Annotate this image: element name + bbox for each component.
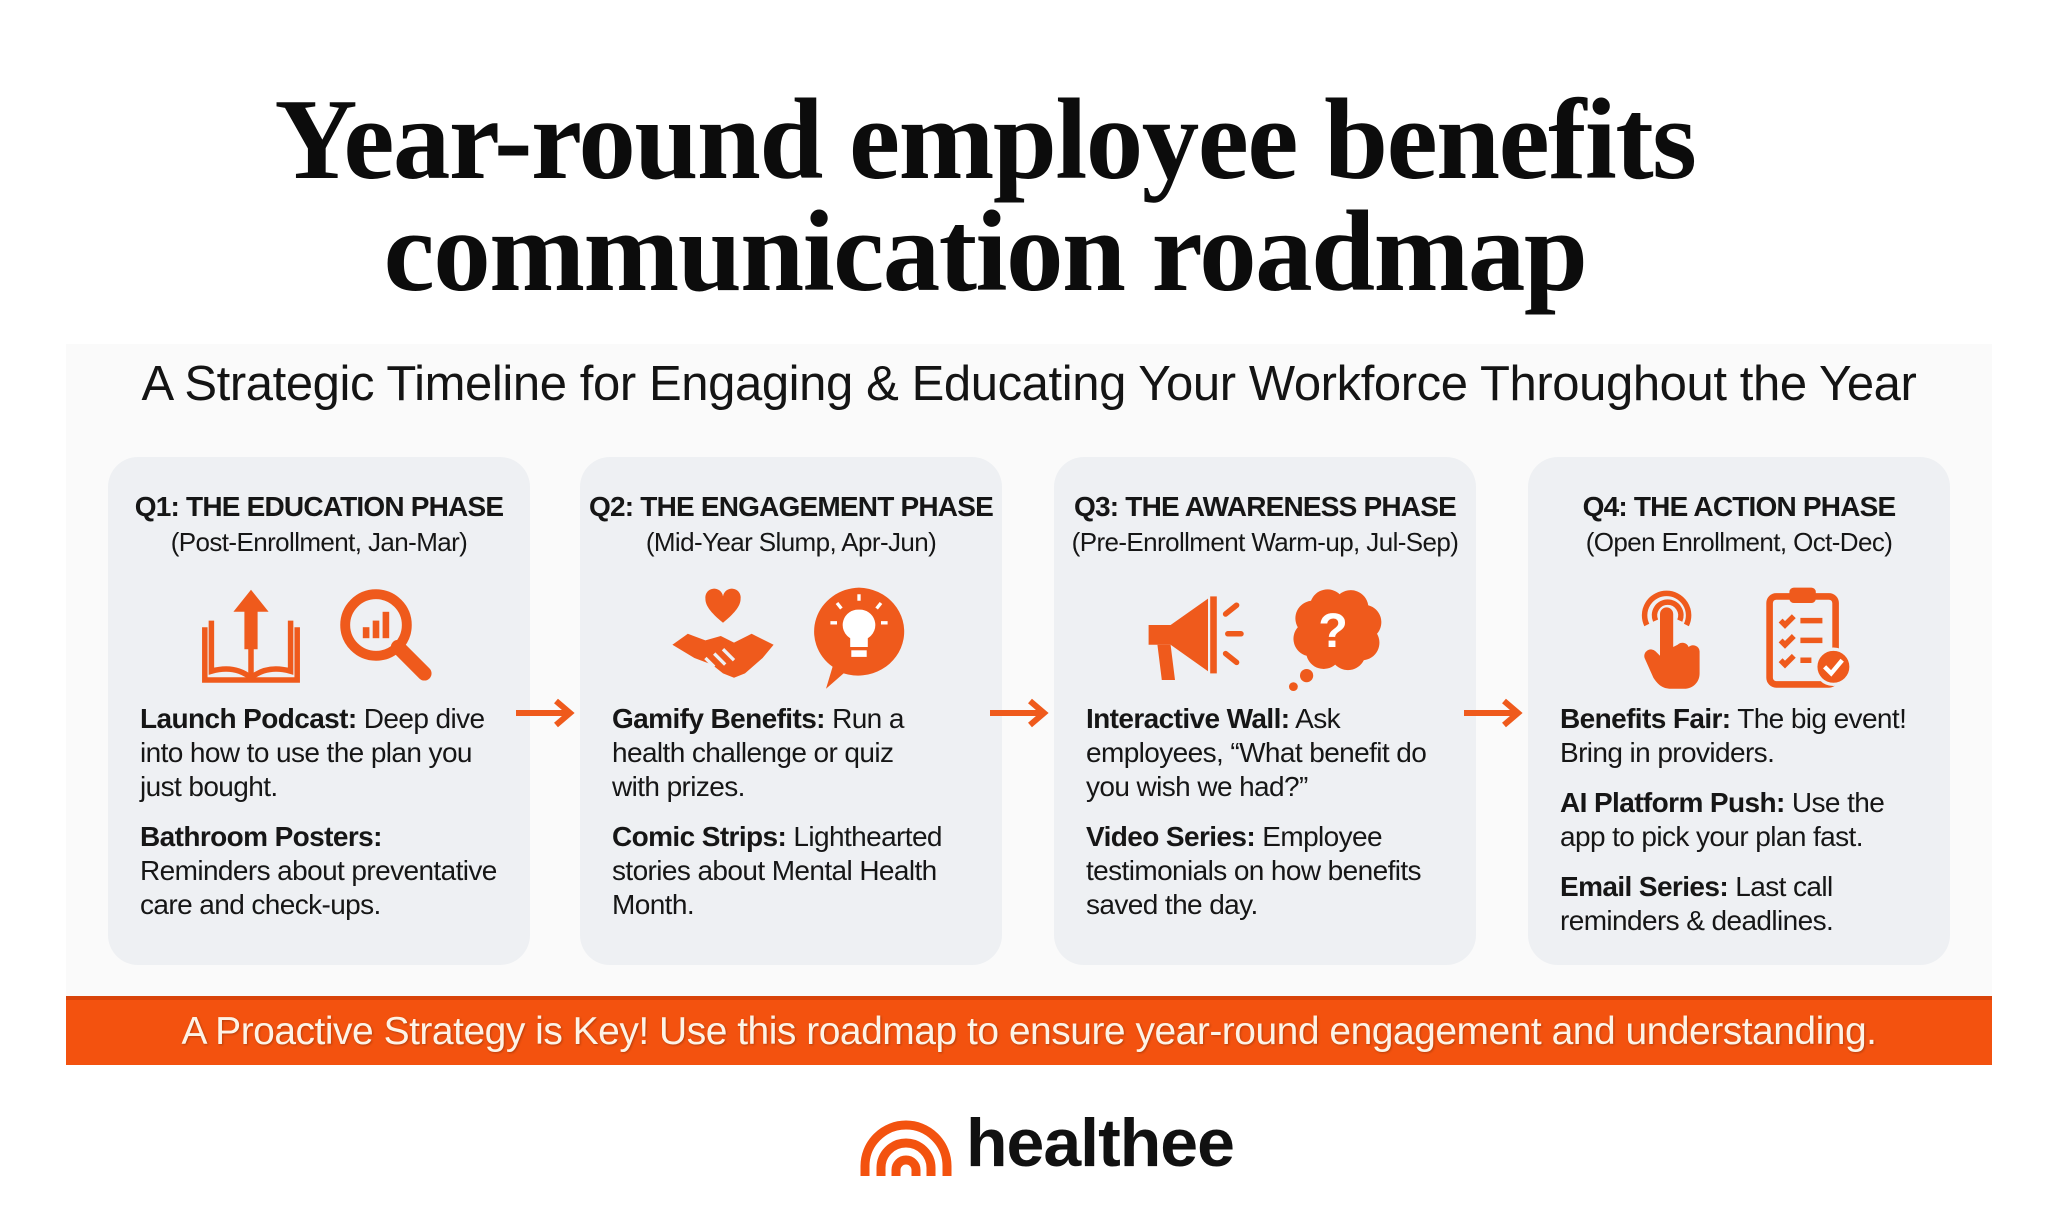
text: Q2 items: health challenge or quiz <box>612 737 893 768</box>
text: Q1 items: care and check-ups. <box>140 889 381 920</box>
background panel <box>66 344 1992 1000</box>
text: Q3 items: saved the day. <box>1086 889 1258 920</box>
heading: Q2: Q2: THE ENGAGEMENT PHASE <box>589 491 993 522</box>
text: Q1 items: Launch Podcast: Deep dive <box>140 703 484 734</box>
title: Year-round employee benefits <box>275 76 1695 203</box>
text: Q1 items: into how to use the plan you <box>140 737 472 768</box>
subheading: Q2: (Mid-Year Slump, Apr-Jun) <box>646 527 936 557</box>
text: Q3 items: testimonials on how benefits <box>1086 855 1421 886</box>
logo: healthee: healthee <box>966 1105 1234 1181</box>
text: Q3 items: employees, “What benefit do <box>1086 737 1426 768</box>
text: Q4 items: Benefits Fair: The big event! <box>1560 703 1906 734</box>
text: Q4 items: Bring in providers. <box>1560 737 1774 768</box>
text: Q3 items <box>1086 703 1426 920</box>
text: Q2 items: Gamify Benefits: Run a <box>612 703 904 734</box>
text: Q4 items: app to pick your plan fast. <box>1560 821 1863 852</box>
text: Q3 items: Video Series: Employee <box>1086 821 1382 852</box>
text: Q3 items: Interactive Wall: Ask <box>1086 703 1340 734</box>
text: Q4 items: reminders & deadlines. <box>1560 905 1833 936</box>
icons: handshake and idea bubble <box>672 588 904 689</box>
heading: Q1: Q1: THE EDUCATION PHASE <box>135 491 503 522</box>
banner: A Proactive Strategy is Key! Use this roadmap to ensure year-round engagement and understanding. <box>181 1010 1877 1053</box>
arrow 3 <box>1464 698 1522 728</box>
text: Q4 items: AI Platform Push: Use the <box>1560 787 1884 818</box>
panel: Q2 <box>580 457 1002 965</box>
subheading: Q1: (Post-Enrollment, Jan-Mar) <box>171 527 467 557</box>
icons: megaphone and question cloud: ? <box>1318 604 1348 658</box>
text: Q1 items <box>139 703 497 920</box>
subtitle: A Strategic Timeline for Engaging & Educating Your Workforce Throughout the Year <box>142 357 1916 411</box>
text: Q2 items: Month. <box>612 889 694 920</box>
icons: tap and checklist <box>1642 588 1850 689</box>
arrow 2 <box>990 698 1048 728</box>
title <box>275 76 1695 315</box>
panel: Q4 <box>1528 457 1950 965</box>
text: Q1 items: Bathroom Posters: <box>140 821 382 852</box>
heading: Q4: Q4: THE ACTION PHASE <box>1583 491 1895 522</box>
panel: Q3 <box>1054 457 1476 965</box>
panel: Q1 <box>108 457 530 965</box>
text: Q1 items: just bought. <box>140 771 278 802</box>
icons: megaphone and question cloud <box>1148 589 1382 691</box>
heading: Q3: Q3: THE AWARENESS PHASE <box>1074 491 1456 522</box>
text: Q2 items: Comic Strips: Lighthearted <box>612 821 942 852</box>
arrow 1 <box>516 698 574 728</box>
text: Q4 items <box>1560 703 1906 936</box>
icons: book and magnifier <box>202 589 432 683</box>
text: Q4 items: Email Series: Last call <box>1560 871 1833 902</box>
subheading: Q4: (Open Enrollment, Oct-Dec) <box>1586 527 1892 557</box>
subheading: Q3: (Pre-Enrollment Warm-up, Jul-Sep) <box>1072 527 1458 557</box>
title: communication roadmap <box>384 188 1586 315</box>
text: Q2 items: with prizes. <box>612 771 745 802</box>
icon: healthee arcs <box>860 1120 952 1176</box>
banner <box>66 996 1992 1065</box>
text: Q1 items: Reminders about preventative <box>140 855 497 886</box>
text: Q3 items: you wish we had?” <box>1086 771 1308 802</box>
text: Q2 items <box>612 703 942 920</box>
text: Q2 items: stories about Mental Health <box>612 855 937 886</box>
